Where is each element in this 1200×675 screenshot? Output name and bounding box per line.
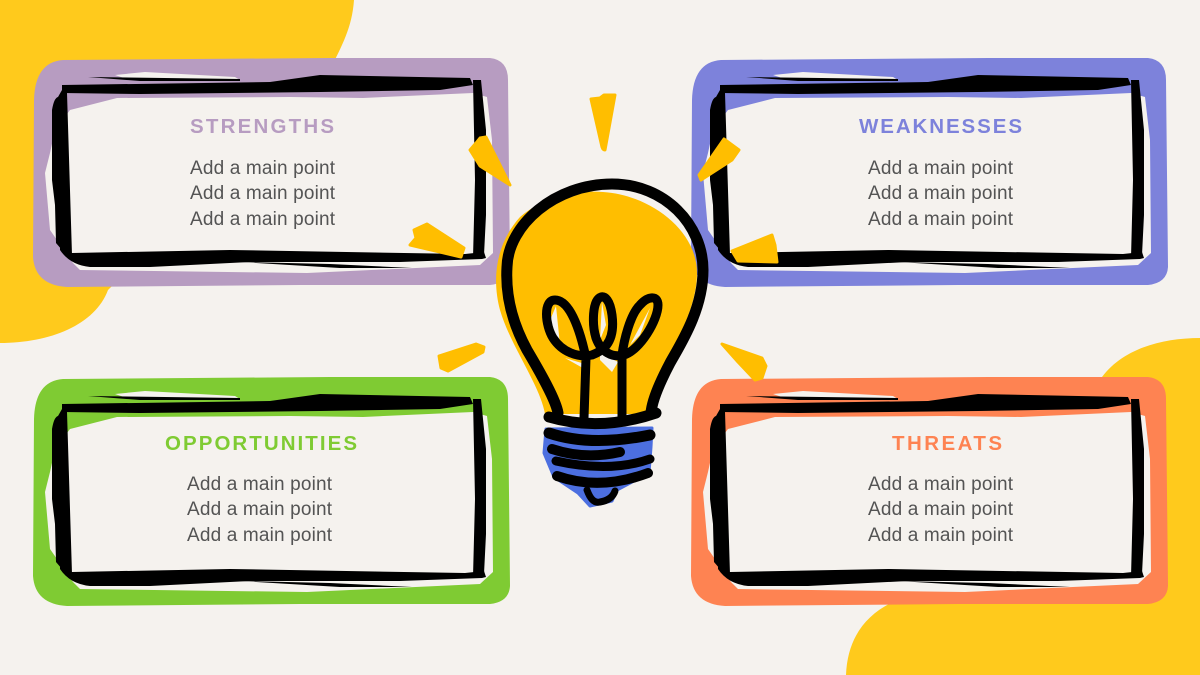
bulb outline [507,184,703,413]
bulb screw base colour [544,428,652,506]
text block: opportunities points: Add a main point [187,499,333,520]
background blob: top left [0,0,354,343]
panel: weaknesses [691,58,1168,287]
text block: opportunities points [187,474,333,546]
text block: weaknesses points: Add a main point [868,183,1014,204]
text block: threats points: Add a main point [868,474,1014,495]
text block: strengths points: Add a main point [190,158,336,179]
frame: threats [691,377,1168,606]
text block: weaknesses points: Add a main point [868,158,1014,179]
text block: strengths points: Add a main point [190,183,336,204]
text block: opportunities points: Add a main point [187,525,333,546]
bulb screw ridges [549,433,650,502]
bulb glass fill [496,192,697,414]
text block: threats points: Add a main point [868,499,1014,520]
text block: weaknesses points: Add a main point [868,209,1014,230]
heading: threats: THREATS [892,432,1002,455]
frame: strengths [33,58,510,287]
background blob: bottom right [846,338,1200,675]
text block: strengths points: Add a main point [190,209,336,230]
text block: opportunities points: Add a main point [187,474,333,495]
panel: strengths [33,58,510,287]
panel: opportunities [33,377,510,606]
heading: strengths: STRENGTHS [190,115,334,138]
text block: weaknesses points [868,158,1014,230]
panel: threats [691,377,1168,606]
frame: weaknesses [691,58,1168,287]
text block: threats points: Add a main point [868,525,1014,546]
frame: opportunities [33,377,510,606]
filament [546,297,658,418]
text block: strengths points [190,158,336,230]
bulb collar [549,413,656,424]
icon: light rays [410,95,777,380]
heading: weaknesses: WEAKNESSES [859,115,1022,138]
filament highlights [548,302,650,372]
heading: opportunities: OPPORTUNITIES [165,432,357,455]
icon: light bulb [496,184,703,506]
text block: threats points [868,474,1014,546]
